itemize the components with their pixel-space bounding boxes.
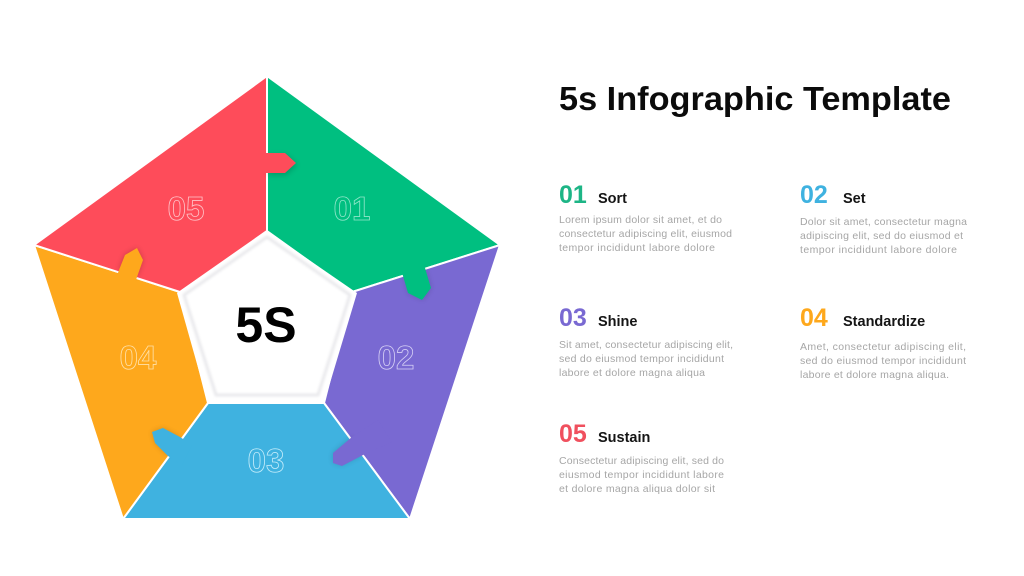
center pentagon xyxy=(177,231,357,403)
item 05 Sustain: Consectetur adipiscing elit, sed do xyxy=(559,455,724,467)
item 04 Standardize: Amet, consectetur adipiscing elit, xyxy=(800,341,966,353)
panel: 02 purple segment xyxy=(324,245,500,519)
panel: 05 red segment xyxy=(34,76,267,292)
segment number 01: 01 xyxy=(334,190,370,227)
item 05 Sustain: 05 xyxy=(559,420,587,448)
item 04 Standardize: labore et dolore magna aliqua. xyxy=(800,369,949,381)
arrow: purple into blue xyxy=(333,420,392,466)
title: 5s Infographic Template xyxy=(559,80,951,117)
item 04 Standardize: sed do eiusmod tempor incididunt xyxy=(800,355,966,367)
item 01 Sort: consectetur adipiscing elit, eiusmod xyxy=(559,228,732,240)
item 03 Shine: sed do eiusmod tempor incididunt xyxy=(559,353,724,365)
item 01 Sort xyxy=(559,181,732,254)
center label: 5S xyxy=(235,297,297,353)
segment number 04: 04 xyxy=(120,339,157,376)
item 02 Set: 02 xyxy=(800,181,828,209)
item 03 Shine xyxy=(559,304,733,379)
item 03 Shine: Sit amet, consectetur adipiscing elit, xyxy=(559,339,733,351)
item 03 Shine: labore et dolore magna aliqua xyxy=(559,367,705,379)
arrow: red into green xyxy=(262,153,297,175)
item 03 Shine: Shine xyxy=(598,314,637,330)
arrow: blue into orange xyxy=(152,428,192,465)
item 04 Standardize xyxy=(800,304,966,381)
item 02 Set: adipiscing elit, sed do eiusmod et xyxy=(800,230,963,242)
segment number 03: 03 xyxy=(248,442,284,479)
panel: 01 green segment xyxy=(267,76,500,292)
item 01 Sort: Sort xyxy=(598,191,627,207)
item 04 Standardize: Standardize xyxy=(843,314,925,330)
segment number 05: 05 xyxy=(168,190,204,227)
item 05 Sustain xyxy=(559,420,724,495)
pentagon diagram xyxy=(34,76,500,519)
item 05 Sustain: eiusmod tempor incididunt labore xyxy=(559,469,724,481)
item 02 Set xyxy=(800,181,967,256)
item 01 Sort: Lorem ipsum dolor sit amet, et do xyxy=(559,214,722,226)
panel: 04 orange segment xyxy=(34,245,208,519)
panel: 03 blue segment xyxy=(123,403,410,519)
item 03 Shine: 03 xyxy=(559,304,587,332)
segment number 02: 02 xyxy=(378,339,414,376)
item 05 Sustain: et dolore magna aliqua dolor sit xyxy=(559,483,715,495)
item 02 Set: Dolor sit amet, consectetur magna xyxy=(800,216,967,228)
item 01 Sort: tempor incididunt labore dolore xyxy=(559,242,715,254)
item 01 Sort: 01 xyxy=(559,181,587,209)
item 02 Set: tempor incididunt labore dolore xyxy=(800,244,957,256)
arrow: green into purple xyxy=(396,250,431,300)
arrow: orange into red xyxy=(111,248,143,297)
item 02 Set: Set xyxy=(843,191,866,207)
item 04 Standardize: 04 xyxy=(800,304,828,332)
item 05 Sustain: Sustain xyxy=(598,430,650,446)
